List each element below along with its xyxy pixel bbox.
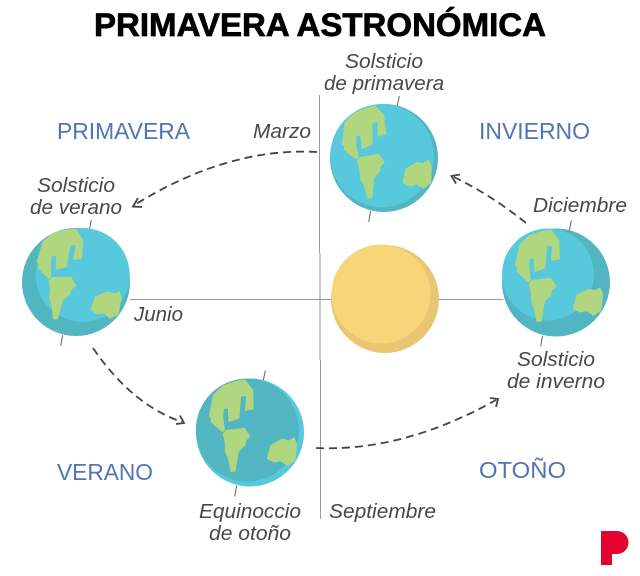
season label: otoño: OTOÑO [479, 457, 566, 483]
arrow: diciembre to marzo [452, 174, 526, 223]
arrow: junio to septiembre [93, 348, 184, 424]
label: equinoccio de otoño: de otoño [209, 523, 291, 545]
horizontal axis line [130, 298, 503, 300]
month label: diciembre: Diciembre [533, 195, 627, 217]
label: solsticio de verano [30, 175, 122, 219]
globe: right, invierno [502, 220, 610, 346]
label: solsticio de invierno: de inverno [507, 371, 605, 393]
title: PRIMAVERA ASTRONÓMICA [94, 7, 546, 43]
season label: verano: VERANO [57, 459, 153, 485]
globe: left, verano [22, 220, 132, 346]
season label: primavera: PRIMAVERA [57, 118, 191, 144]
label: solsticio de primavera: Solsticio [345, 51, 423, 73]
month label: junio: Junio [133, 304, 183, 326]
season label: invierno: INVIERNO [479, 118, 590, 144]
logo: red P [601, 531, 628, 565]
label: solsticio de invierno [507, 349, 605, 393]
label: solsticio de primavera [324, 51, 444, 95]
month label: septiembre: Septiembre [329, 501, 436, 523]
label: equinoccio de otoño: Equinoccio [199, 501, 301, 523]
arrow: marzo to junio [133, 152, 317, 207]
globe: top, primavera [330, 96, 438, 222]
arrow: septiembre to diciembre [316, 398, 498, 448]
label: equinoccio de otoño [199, 501, 301, 545]
month label: marzo: Marzo [253, 121, 311, 143]
sun [331, 244, 439, 353]
label: solsticio de invierno: Solsticio [517, 349, 595, 371]
label: solsticio de verano: Solsticio [37, 175, 115, 197]
label: solsticio de verano: de verano [30, 197, 122, 219]
vertical axis line [320, 95, 321, 519]
label: solsticio de primavera: de primavera [324, 73, 444, 95]
globe: bottom, otoño [196, 370, 304, 496]
